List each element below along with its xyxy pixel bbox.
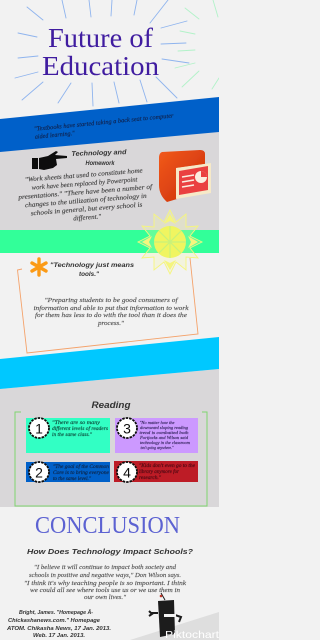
gray reading panel bbox=[0, 369, 219, 507]
citation bbox=[6, 609, 111, 639]
title: Education bbox=[42, 51, 160, 81]
card 3: "No matter how the bbox=[140, 420, 175, 425]
preparing students quote: information and able to put that information to work bbox=[34, 305, 190, 312]
card 2: Core is to bring everyone bbox=[53, 470, 110, 476]
conclusion quote: we could all see where tools use us or we use them in bbox=[30, 587, 181, 594]
quote heading: tools." bbox=[79, 271, 100, 278]
preparing students quote: for them has less to do with the tool than it does the bbox=[35, 312, 187, 319]
card 4: library anymore for bbox=[139, 468, 180, 475]
card 3: trend is combatted both bbox=[140, 430, 189, 435]
conclusion quote: our own lives." bbox=[84, 594, 126, 601]
homework quote: "Work sheets that used to constitute home bbox=[25, 167, 143, 184]
card 2: to the same level." bbox=[53, 476, 92, 482]
homework quote: schools in general, but every school is bbox=[30, 202, 143, 217]
icon: pointing hand bbox=[32, 151, 67, 170]
preparing students quote bbox=[34, 297, 190, 327]
card 4: research." bbox=[139, 475, 162, 481]
conclusion quote bbox=[24, 564, 187, 601]
heading: technology and homework bbox=[71, 149, 127, 167]
heading: technology and homework: Technology and bbox=[71, 149, 127, 158]
card 2: 2 bbox=[35, 464, 43, 480]
title: Future of bbox=[48, 23, 153, 53]
blue quote band: aided learning." bbox=[35, 130, 75, 141]
conclusion title: CONCLUSION bbox=[35, 513, 180, 539]
reading frame bbox=[15, 412, 207, 506]
card 1 bbox=[26, 418, 110, 453]
title rays bbox=[15, 0, 219, 106]
card 1: in the same class." bbox=[52, 432, 93, 438]
card 3: 3 bbox=[123, 420, 131, 436]
citation: Bright, James. "Homepage Â- bbox=[19, 609, 93, 616]
citation: ATOM. Chikasha News, 17 Jan. 2013. bbox=[6, 626, 111, 632]
conclusion quote: "I believe it will continue to impact both society and bbox=[34, 564, 177, 571]
card 3: isn't going anywhere." bbox=[140, 445, 174, 450]
card 2: "The goal of the Common bbox=[53, 463, 109, 470]
card 1: "There are so many bbox=[52, 420, 101, 426]
frame around quote bbox=[18, 258, 198, 353]
card 1: different levels of readers bbox=[52, 425, 108, 432]
title bbox=[42, 23, 160, 81]
icon: yellow star burst bbox=[138, 210, 202, 274]
icon: presentation software logo bbox=[159, 150, 211, 202]
card 4 bbox=[114, 461, 198, 482]
card 3: downward sloping reading bbox=[140, 425, 189, 430]
preparing students quote: process." bbox=[97, 320, 124, 327]
quote heading: "Technology just means bbox=[50, 262, 134, 269]
citation: Chickashanews.com." Homepage bbox=[8, 618, 101, 624]
green band bbox=[0, 230, 219, 253]
card 3: technology in the classroom bbox=[140, 440, 190, 445]
homework quote: changes to the utilization of technology in bbox=[25, 193, 148, 209]
gray homework panel bbox=[0, 130, 219, 230]
heading: technology and homework: Homework bbox=[86, 160, 116, 167]
conclusion quote: "I think it's why teaching people is so important. I think bbox=[24, 580, 187, 587]
cyan band bbox=[0, 337, 219, 389]
homework quote bbox=[16, 167, 156, 227]
card 3: Fortjacks and Wilson said bbox=[139, 435, 189, 440]
card 4: "Kids don't even go to the bbox=[139, 463, 196, 469]
card 1: 1 bbox=[35, 420, 43, 436]
quote heading bbox=[50, 262, 134, 278]
blue quote band bbox=[0, 97, 219, 152]
icon: orange asterisk bbox=[32, 259, 46, 275]
card 2 bbox=[26, 462, 110, 482]
blue quote band: "Textbooks have started taking a back seat to computer bbox=[34, 112, 174, 133]
bottom gray wedge bbox=[130, 612, 219, 640]
reading heading: Reading bbox=[92, 400, 131, 411]
conclusion quote: schools in positive and negative ways," Don Wilson says. bbox=[29, 572, 181, 579]
homework quote: work have been replaced by Powerpoint bbox=[31, 176, 138, 192]
homework quote: presentations." "There have been a number of bbox=[17, 184, 154, 201]
preparing students quote: "Preparing students to be good consumers of bbox=[44, 297, 179, 304]
card 4: 4 bbox=[123, 464, 131, 480]
icon: robot bbox=[149, 593, 181, 637]
card 3 bbox=[115, 418, 198, 453]
citation: Web. 17 Jan. 2013. bbox=[33, 633, 85, 639]
conclusion subheading: How Does Technology Impact Schools? bbox=[27, 547, 193, 556]
homework quote: different." bbox=[73, 213, 102, 223]
